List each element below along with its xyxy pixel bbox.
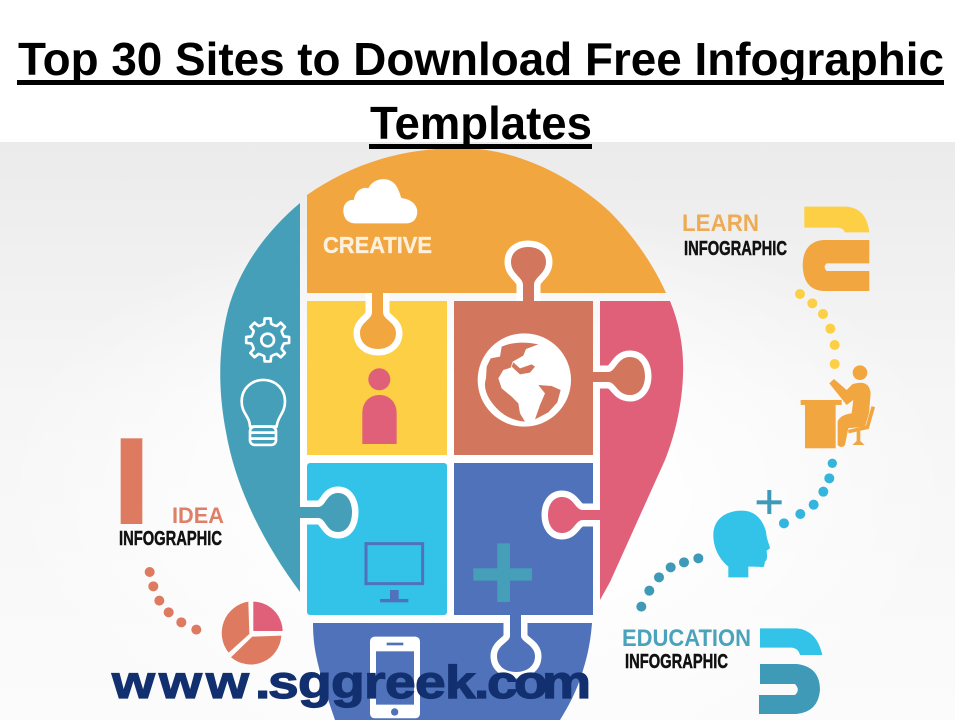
knob: pink fill xyxy=(548,497,605,533)
title underline 1 xyxy=(17,80,944,85)
label: learn infographic: INFOGRAPHIC xyxy=(684,238,787,260)
title line 1: Top 30 Sites to Download Free Infographic xyxy=(18,33,944,85)
cyan dots xyxy=(779,459,837,528)
puzzle piece: terracotta square xyxy=(454,301,593,455)
idea dots xyxy=(145,567,201,635)
label: creative: CREATIVE xyxy=(323,232,432,258)
puzzle piece: lower blue base xyxy=(313,623,592,720)
idea bar xyxy=(121,438,142,524)
label: idea: IDEA xyxy=(172,503,224,528)
title line 2: Templates xyxy=(370,97,592,149)
puzzle piece: cyan xyxy=(307,463,447,615)
background panel xyxy=(0,142,955,720)
label: learn: LEARN xyxy=(682,210,759,237)
icon: head xyxy=(713,511,770,577)
knob: terracotta right fill xyxy=(590,357,645,395)
title underline 2 xyxy=(369,144,592,149)
puzzle piece: pink right xyxy=(600,301,683,600)
title xyxy=(17,33,944,149)
learn dots xyxy=(795,289,840,369)
icon: person at desk xyxy=(801,365,873,448)
knob outline: teal into cyan xyxy=(290,493,352,532)
icon: small plus xyxy=(757,490,782,514)
label: education infographic: INFOGRAPHIC xyxy=(625,651,728,673)
numeral three: cyan part xyxy=(760,628,822,655)
website watermark: www.sggreek.com xyxy=(111,656,591,708)
icon: gear xyxy=(246,319,289,361)
pie chart icon xyxy=(222,602,283,664)
numeral two: yellow part xyxy=(804,207,869,232)
numeral two: orange part xyxy=(803,240,869,291)
icon: cloud xyxy=(343,179,417,223)
knob: terracotta top fill xyxy=(511,247,546,305)
section: learn xyxy=(795,207,873,448)
knob outline: blue into base xyxy=(497,610,535,672)
icon: globe xyxy=(478,333,571,427)
light bulb puzzle xyxy=(220,148,683,720)
label: idea infographic: INFOGRAPHIC xyxy=(119,528,222,550)
label: education: EDUCATION xyxy=(622,625,751,652)
knob outline: terracotta up xyxy=(511,247,546,305)
icon: plus xyxy=(473,543,532,602)
puzzle piece: teal left xyxy=(220,203,300,592)
puzzle piece: blue square xyxy=(454,463,593,615)
knob body: blue stem xyxy=(497,610,535,672)
education dots xyxy=(636,553,703,612)
section: education xyxy=(636,459,837,714)
knob outline: orange into yellow xyxy=(360,285,396,349)
puzzle piece: orange top xyxy=(307,148,666,293)
icon: person xyxy=(362,368,397,444)
numeral three: teal part xyxy=(759,664,820,714)
icon: light bulb xyxy=(242,380,285,445)
icon: monitor xyxy=(366,544,423,602)
icon: phone xyxy=(370,637,420,718)
knob outline: terracotta right xyxy=(590,357,645,395)
knob fill: blue square stem xyxy=(454,463,593,615)
knob: orange fill xyxy=(360,288,396,349)
puzzle piece: yellow xyxy=(307,301,447,455)
knob: teal fill xyxy=(295,493,352,532)
knob outline: pink into blue xyxy=(548,497,610,533)
section: idea xyxy=(121,438,283,664)
